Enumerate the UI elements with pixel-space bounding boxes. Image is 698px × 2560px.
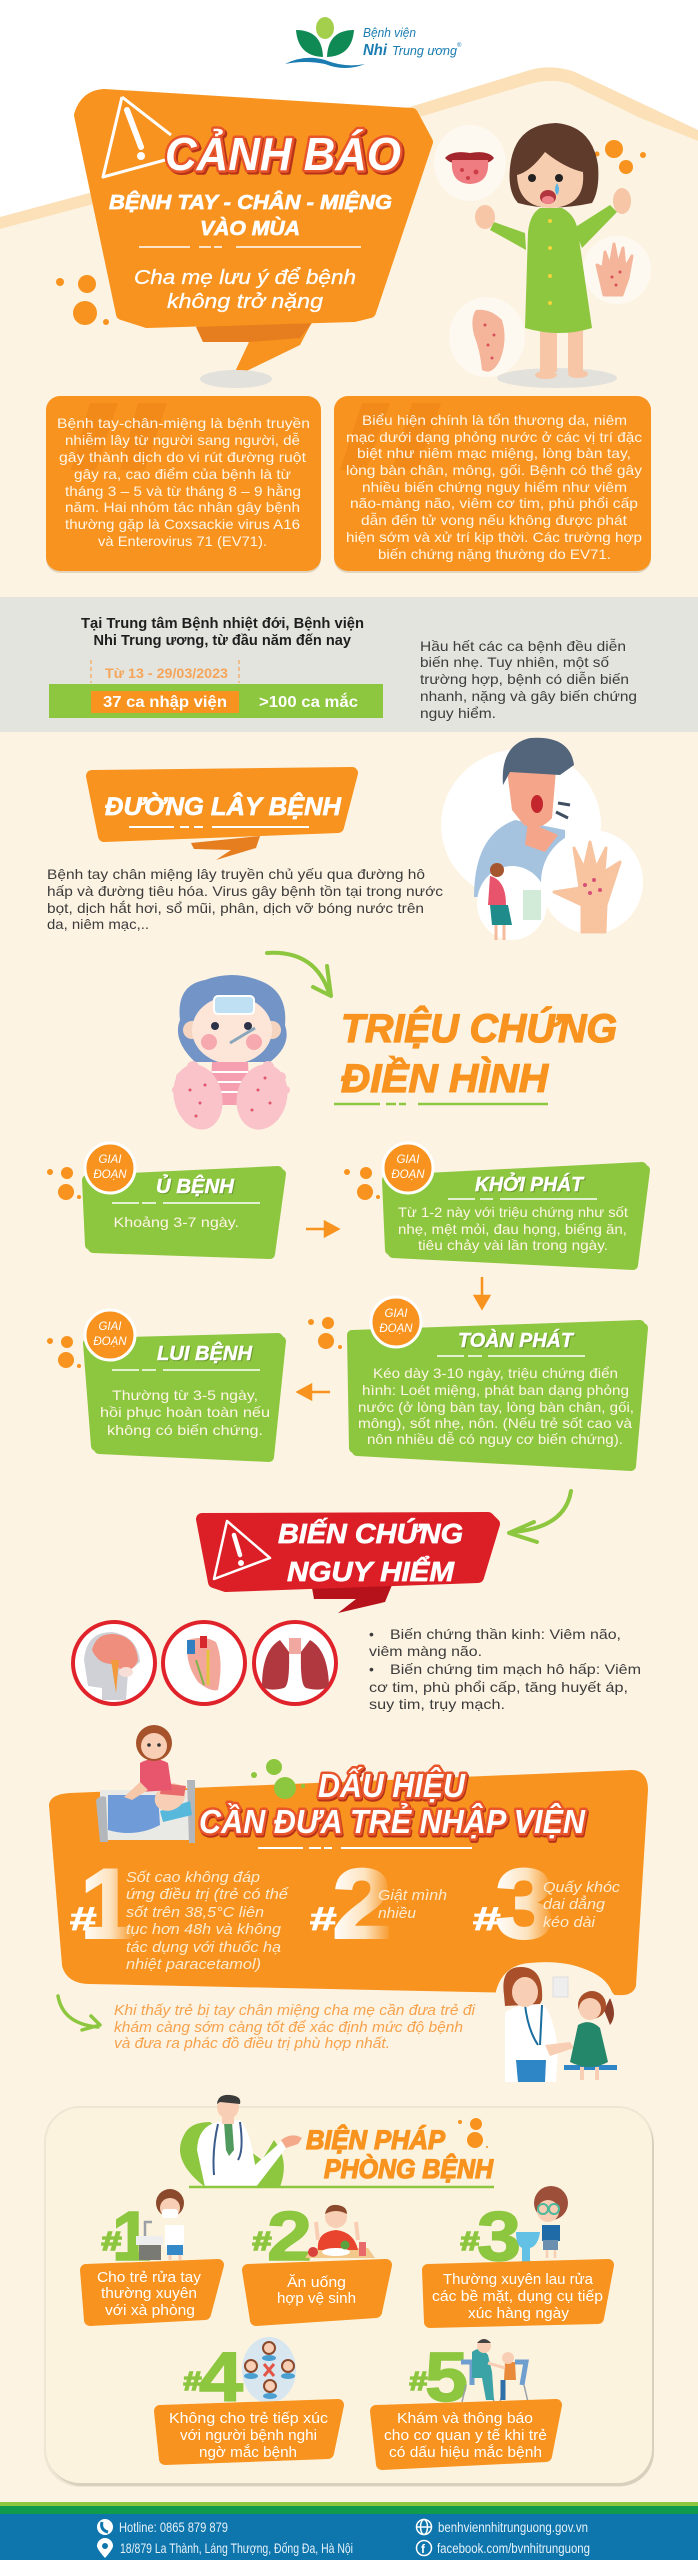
text: complications list: cơ tim, phù phổi cấp, tăng huyết áp, (369, 1679, 628, 1695)
blob text (160, 2405, 338, 2461)
sign 1: ứng điều trị (trẻ có thể (126, 1886, 289, 1903)
text: full-blown stage: mông), sốt nhẹ, nôn. (Nếu trẻ sốt cao và (358, 1415, 632, 1431)
text: onset (398, 1204, 628, 1253)
illustration: mother and child in bed (96, 1725, 195, 1843)
arrow: to complications (509, 1491, 571, 1542)
text: transmission: Bệnh tay chân miệng lây truyền chủ yếu qua đường hô (47, 866, 425, 882)
sign 1: Sốt cao không đáp (126, 1869, 260, 1886)
text: full-blown stage (358, 1365, 634, 1447)
quote mark (71, 403, 167, 470)
text: full-blown stage: Kéo dày 3-10 ngày, triệu chứng điển (373, 1365, 618, 1381)
logo text (363, 25, 462, 59)
text: transmission: bọt, dịch hắt hơi, sổ mũi, phân, dịch vỡ bóng nước trên (47, 900, 424, 916)
text: description left: và Enterovirus 71 (EV71). (98, 533, 267, 549)
text: description right: não-màng não, viêm cơ tim, phù phổi cấp (350, 495, 638, 511)
text: description right: Biểu hiện chính là tổn thương da, niêm (362, 412, 627, 428)
dots (251, 1759, 305, 1799)
banner: warning title (80, 95, 427, 378)
item 1: 1 (112, 2197, 151, 2275)
text: advice: và đưa ra phác đồ điều trị phù hợp nhất. (114, 2036, 390, 2052)
item 5: # (409, 2366, 428, 2396)
badge: GIAI (384, 1308, 408, 1320)
blob text: xúc hàng ngày (468, 2306, 570, 2322)
icon: facebook: f (421, 2542, 426, 2556)
blob text (248, 2265, 386, 2320)
contact: hotline: Hotline: 0865 879 879 (119, 2519, 228, 2535)
text: description right: dẫn đến tử vong nếu không được phát (361, 512, 627, 528)
text: statistics note: trường hợp, bệnh có diễn biến (420, 671, 629, 687)
item 2: # (252, 2226, 272, 2256)
badge: GIAI (396, 1154, 420, 1166)
date label: Từ 13 - 29/03/2023 (105, 665, 228, 681)
logo text: Trung ương (392, 43, 458, 58)
stat bar: 37 ca nhập viện (103, 694, 227, 711)
item 4: 4 (199, 2338, 243, 2416)
sign 1 (69, 1848, 289, 1973)
text: description right: nhiều biến chứng nguy hiểm như viêm (362, 479, 627, 495)
title (199, 1767, 587, 1842)
contact: facebook: facebook.com/bvnhitrunguong (437, 2540, 590, 2556)
heading: prevention: PHÒNG BỆNH (324, 2153, 493, 2184)
illustration: avoid contact (242, 2337, 296, 2403)
item 3 (428, 2186, 608, 2322)
icon: hospital emblem (285, 17, 365, 68)
sign 1: tác dụng với thuốc hạ (126, 1939, 281, 1956)
text: advice (114, 2003, 476, 2052)
illustration: doctor examining child (503, 1967, 617, 2082)
subtitle (109, 190, 392, 240)
logo text: ® (457, 42, 462, 49)
sign 3: kéo dài (543, 1914, 596, 1931)
decorative dots (56, 140, 646, 325)
item 4: # (183, 2366, 202, 2396)
tagline: không trở nặng (167, 291, 323, 313)
banner: transmission: ĐƯỜNG LÂY BỆNH (105, 791, 342, 821)
text: transmission (47, 866, 443, 932)
sign 3: Quấy khóc (543, 1879, 621, 1896)
blob text: Cho trẻ rửa tay (97, 2270, 202, 2286)
illustration: hand washing (136, 2189, 184, 2260)
sign 2: nhiều (378, 1905, 417, 1922)
arrow: right (306, 1222, 338, 1236)
badge: ĐOẠN (93, 1336, 127, 1348)
badge (371, 1297, 421, 1347)
icon: heart (163, 1622, 245, 1704)
arrow: left (298, 1385, 330, 1399)
text: complications list: Biến chứng tim mạch hô hấp: Viêm (390, 1661, 641, 1677)
sign 3: # (472, 1901, 500, 1937)
item 4 (160, 2337, 338, 2461)
blob text: với xà phòng (105, 2303, 195, 2319)
title: DẤU HIỆU (318, 1767, 466, 1804)
card: recovery: LUI BỆNH (157, 1341, 253, 1365)
text: full-blown stage: nôn nhiều dễ có nguy cơ biến chứng). (367, 1431, 623, 1447)
text: complications list: viêm màng não. (369, 1643, 482, 1659)
text: description left: năm. Hai nhóm tác nhân gây bệnh (65, 499, 300, 515)
sign 1: # (69, 1901, 96, 1937)
card: recovery (47, 1310, 281, 1457)
arrow: down (475, 1277, 489, 1308)
arrow: to advice (58, 1996, 100, 2030)
banner text (278, 1518, 463, 1587)
text: recovery: Thường từ 3-5 ngày, (112, 1387, 258, 1403)
sign 2 (309, 1848, 447, 1959)
blob text: thường xuyên (101, 2286, 197, 2302)
heading: statistics: Nhi Trung ương, từ đầu năm đến nay (94, 633, 351, 649)
text: recovery: không có biến chứng. (107, 1422, 263, 1438)
text: statistics note: nhanh, nặng và gây biến chứng (420, 688, 637, 704)
blob text (376, 2405, 556, 2464)
logo (285, 17, 462, 68)
sign 1: tục hơn 48h và không (126, 1921, 282, 1938)
blob text: cho cơ quan y tế khi trẻ (384, 2428, 547, 2444)
logo text: Bệnh viện (363, 25, 416, 40)
girl figure (475, 123, 631, 379)
text: description right: biệt như niêm mạc miệng, lòng bàn tay, (357, 445, 631, 461)
tagline (134, 267, 356, 313)
item 3: 3 (477, 2197, 521, 2275)
banner tail (196, 322, 312, 378)
icon: brain (73, 1622, 155, 1704)
illustration: cleaning (516, 2186, 568, 2262)
blob text: các bề mặt, dụng cụ tiếp (432, 2289, 603, 2305)
blob text: với người bệnh nghi (180, 2428, 317, 2444)
sign 3 (472, 1848, 621, 1959)
quote mark (340, 403, 441, 470)
subtitle: VÀO MÙA (200, 216, 300, 240)
card: incubation: Khoảng 3-7 ngày. (114, 1214, 239, 1230)
title: DẤU HIỆU (319, 1769, 467, 1806)
item 5: 5 (425, 2338, 468, 2416)
logo text: Nhi (363, 42, 388, 59)
text: description left: nhiễm lây từ người sang người, dễ (65, 432, 300, 448)
text: statistics note: nguy hiểm. (420, 705, 496, 721)
banner text: BIẾN CHỨNG (278, 1518, 463, 1549)
panel: prevention (44, 2095, 654, 2487)
banner: dangerous complications (202, 1518, 494, 1613)
icon: warning triangle (103, 97, 171, 177)
text: onset: Từ 1-2 này với triệu chứng như sốt (398, 1204, 628, 1220)
text: advice: khám càng sớm càng tốt để xác định mức độ bệnh (114, 2020, 463, 2036)
text: statistics note (420, 638, 637, 721)
text: description left: Bệnh tay-chân-miệng là bệnh truyền (57, 415, 310, 431)
sign 1: nhiệt paracetamol) (126, 1956, 261, 1973)
panel: disease description (46, 396, 321, 573)
badge: GIAI (98, 1154, 122, 1166)
blob text: có dấu hiệu mắc bệnh (389, 2444, 542, 2461)
sign 1: sốt trên 38,5°C liên (126, 1904, 264, 1921)
panel: symptoms description (334, 396, 651, 573)
card: incubation: Ủ BỆNH (156, 1174, 235, 1198)
bubble: hand rash (541, 830, 643, 934)
blob text: Ăn uống (287, 2274, 346, 2291)
bubble: hand (583, 236, 651, 304)
sign 2: Giật mình (378, 1887, 447, 1904)
text: advice: Khi thấy trẻ bị tay chân miệng cha mẹ cần đưa trẻ đi (114, 2003, 476, 2019)
illustration: feverish girl (167, 975, 294, 1135)
arrow: to symptoms (267, 953, 331, 996)
blob text: Không cho trẻ tiếp xúc (169, 2411, 328, 2427)
badge: ĐOẠN (379, 1323, 413, 1335)
stat bar: >100 ca mắc (259, 693, 358, 711)
text: onset: tiêu chảy vài lần trong ngày. (418, 1237, 608, 1253)
text: description right: hiện sớm và xử trí kịp thời. Các trường hợp (346, 529, 642, 545)
text: complications list: suy tim, trụy mạch. (369, 1696, 505, 1712)
text: description right: lòng bàn chân, mông, gối. Bệnh có thể gây (346, 462, 642, 478)
text: recovery: hồi phục hoàn toàn nếu (100, 1404, 270, 1420)
badge (85, 1310, 135, 1360)
title: CẢNH BÁO: CẢNH BÁO (167, 130, 403, 182)
subtitle: BỆNH TAY - CHÂN - MIỆNG (109, 190, 392, 214)
panel: hospital admission signs (55, 1759, 642, 2002)
illustration: sick girl (200, 123, 651, 388)
text: description right (346, 412, 642, 562)
sign 2: 2 (332, 1848, 392, 1959)
panel: statistics band (0, 597, 698, 732)
icon: globe (416, 2520, 432, 2534)
blob text: Khám và thông báo (397, 2411, 533, 2427)
blob text: ngờ mắc bệnh (199, 2444, 297, 2461)
card: incubation (47, 1143, 281, 1254)
icon: warning triangle (214, 1521, 270, 1579)
text: description right: mạc dưới dạng phỏng nước ở các vị trí đặc (346, 429, 642, 445)
sign 3: dai dẳng (543, 1895, 606, 1913)
tagline: Cha mẹ lưu ý để bệnh (134, 267, 356, 289)
item 1: # (101, 2226, 122, 2256)
contact: website: benhviennhitrunguong.gov.vn (438, 2519, 588, 2535)
text: description left (57, 415, 310, 549)
text: statistics note: biến nhẹ. Tuy nhiên, một số (420, 654, 609, 670)
text: complications list: • (369, 1661, 374, 1677)
bubble: tongue (434, 125, 506, 201)
bubble: stomach ache (477, 863, 547, 940)
text: description left: tháng 3 – 5 và từ tháng 8 – 9 hằng (65, 483, 301, 499)
item 3: # (460, 2226, 480, 2256)
text: full-blown stage: nước (ở lòng bàn tay, lòng bàn chân, gối, (358, 1399, 634, 1415)
badge: ĐOẠN (391, 1169, 425, 1181)
footer (0, 2502, 698, 2560)
card: onset: KHỞI PHÁT (475, 1173, 585, 1196)
item 5 (376, 2338, 556, 2464)
text: description left: thường gặp là Coxsackie virus A16 (65, 516, 300, 532)
text: transmission: da, niêm mạc,.. (47, 916, 149, 932)
heading: prevention (189, 2118, 494, 2187)
blob text: Thường xuyên lau rửa (443, 2272, 594, 2288)
blob text (86, 2265, 218, 2320)
text: complications list (369, 1626, 641, 1712)
text: recovery (100, 1387, 270, 1438)
illustration: coughing man (441, 738, 643, 940)
icon: phone (97, 2519, 113, 2535)
heading: statistics (81, 616, 364, 649)
title: CẦN ĐƯA TRẺ NHẬP VIỆN (199, 1803, 586, 1840)
title: CẢNH BÁO: CẢNH BÁO (165, 128, 401, 180)
sign 1: 1 (80, 1848, 135, 1959)
illustration: doctor visit (461, 2339, 528, 2402)
icon: facebook (416, 2540, 432, 2556)
text: transmission: hấp và đường tiêu hóa. Virus gây bệnh tồn tại trong nước (47, 883, 443, 899)
blob text: hợp vệ sinh (277, 2291, 356, 2307)
text: statistics note: Hầu hết các ca bệnh đều diễn (420, 638, 626, 654)
card: full-blown stage: TOÀN PHÁT (458, 1329, 575, 1352)
blob text (428, 2265, 608, 2322)
badge (383, 1143, 433, 1193)
icon: lungs (254, 1622, 336, 1704)
badge: GIAI (98, 1321, 122, 1333)
text: full-blown stage: hình: Loét miệng, phát ban dạng phỏng (362, 1382, 629, 1398)
text: complications list: • (369, 1626, 374, 1642)
contact: address: 18/879 La Thành, Láng Thượng, Đống Đa, Hà Nội (120, 2540, 353, 2556)
text: onset: nhẹ, mệt mỏi, đau họng, biếng ăn, (398, 1221, 627, 1237)
bubble: foot (449, 297, 525, 377)
item 2: 2 (267, 2197, 312, 2275)
icon: location pin (97, 2538, 113, 2558)
text: description left: gây ra, cao điểm của bệnh là từ (74, 466, 291, 482)
item 1 (86, 2189, 218, 2320)
item 2 (248, 2197, 386, 2320)
banner body (80, 95, 427, 322)
badge (85, 1143, 135, 1193)
heading: typical symptoms: TRIỆU CHỨNG (341, 1005, 617, 1051)
heading: typical symptoms: ĐIỀN HÌNH (341, 1055, 549, 1101)
text: description right: biến chứng nặng thường do EV71. (378, 546, 611, 562)
card: onset (344, 1143, 645, 1265)
title: CẦN ĐƯA TRẺ NHẬP VIỆN (200, 1805, 587, 1842)
banner text: NGUY HIỂM (287, 1556, 455, 1587)
card: full-blown stage (308, 1297, 643, 1466)
heading: typical symptoms (334, 1005, 617, 1104)
sign 3: 3 (495, 1848, 554, 1959)
illustration: pointing doctor (180, 2095, 302, 2187)
sign 2: # (309, 1901, 336, 1937)
text: complications list: Biến chứng thần kinh: Viêm não, (390, 1626, 621, 1642)
illustration: healthy eating (305, 2205, 375, 2258)
heading: prevention: BIỆN PHÁP (306, 2124, 446, 2155)
badge: ĐOẠN (93, 1169, 127, 1181)
heading: statistics: Tại Trung tâm Bệnh nhiệt đới, Bệnh viện (81, 616, 364, 632)
banner: transmission (92, 773, 352, 860)
stat bar (49, 684, 383, 718)
text: description left: gây thành dịch do vi rút đường ruột (59, 449, 306, 465)
